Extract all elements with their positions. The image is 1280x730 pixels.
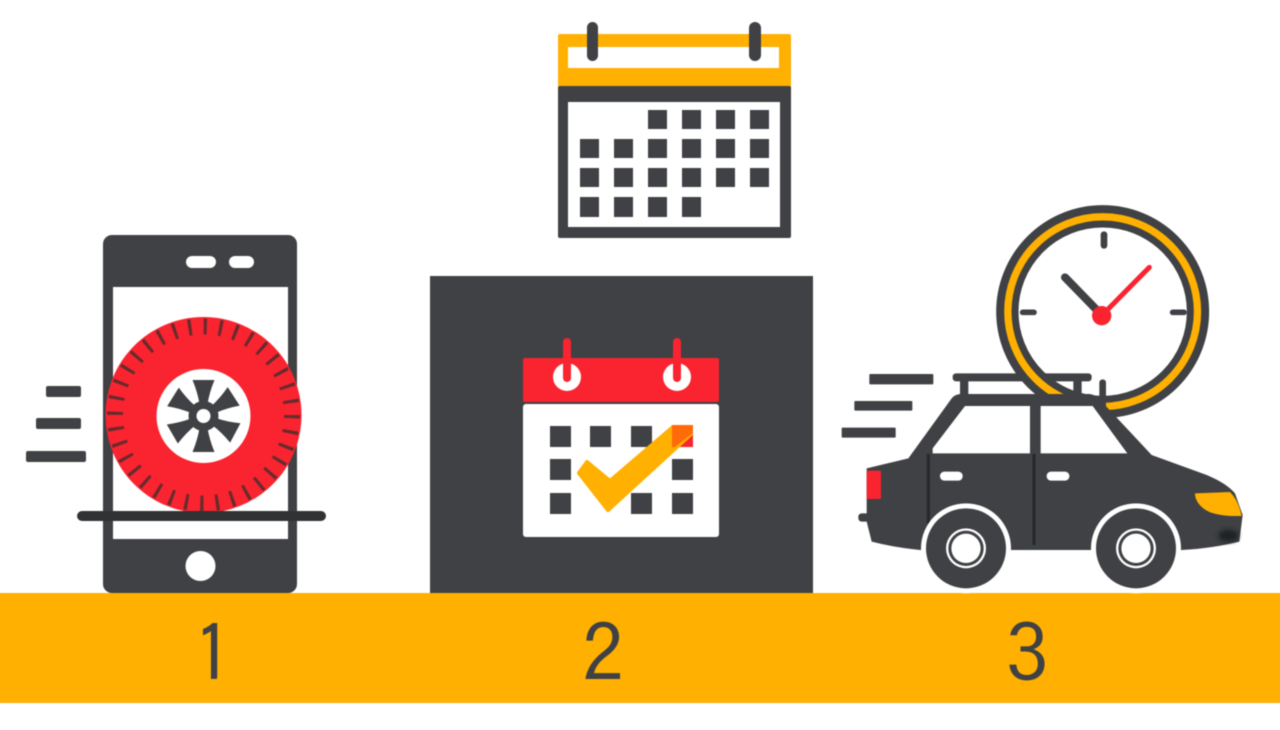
icon: red calendar with check mark [523,338,719,537]
rear wheel [921,503,1011,593]
icon: speed lines left of phone [26,386,86,462]
number 3: 3 [1006,612,1048,693]
icon: clock [953,209,1205,414]
panel: step 2 dark square [430,276,813,593]
icon: check mark [579,425,693,510]
icon: red tire [106,317,302,513]
yellow number band [0,593,1280,703]
panel: step 3 car and clock [842,209,1243,593]
icon: smartphone [103,235,297,593]
icon: yellow calendar above [558,22,791,238]
ground line under tire [77,511,326,521]
icon: car [858,394,1243,593]
number 2: 2 [582,613,624,693]
number 1: 1 [194,613,232,693]
panel: step 1 phone with tire [26,235,326,593]
front wheel [1091,503,1181,593]
icon: speed lines behind car [842,374,933,438]
roof rack [953,373,1092,397]
